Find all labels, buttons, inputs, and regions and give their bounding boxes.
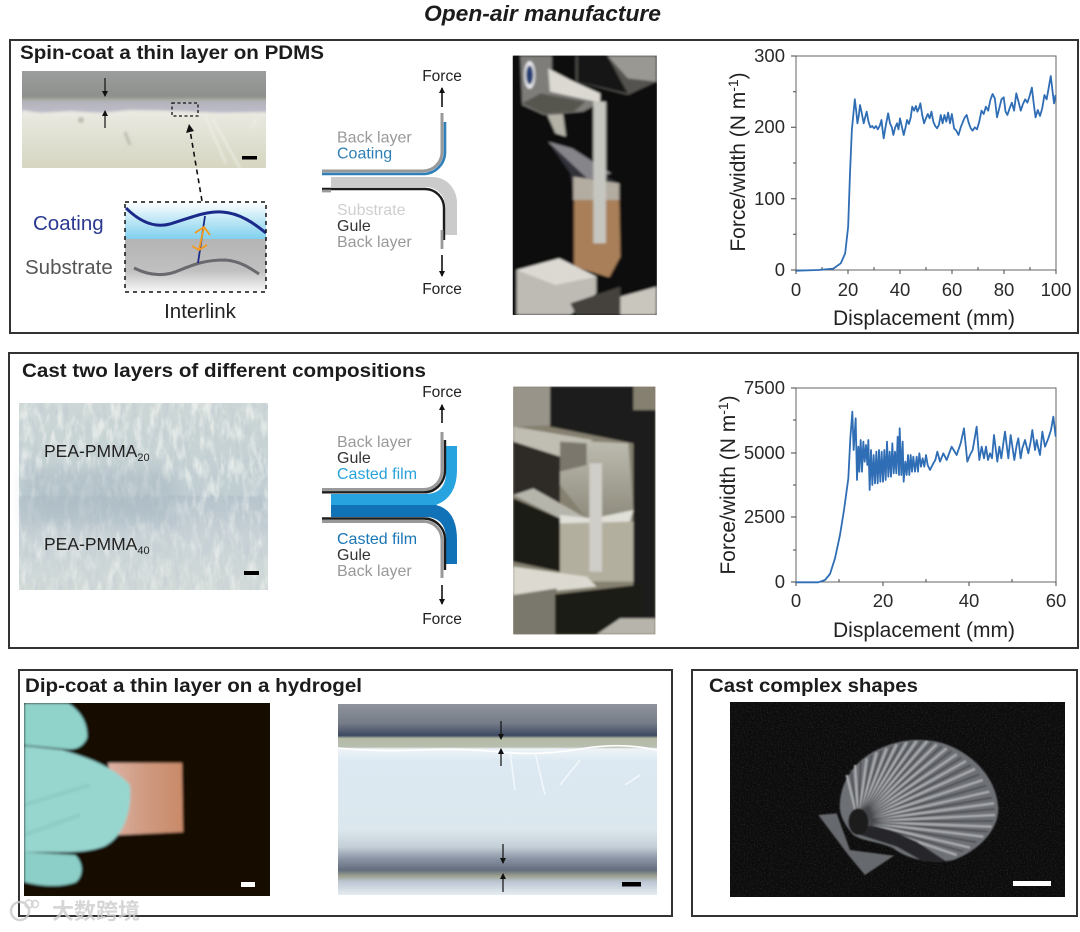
peel test diagram: casted films: Gule [337,547,371,564]
micrograph: PEA-PMMA layers [19,403,268,590]
force/width chart: casted films: 20 [873,590,893,611]
micrograph: PEA-PMMA layers: PEA-PMMA [44,534,137,554]
force/width chart: casted films: Displacement (mm) [833,619,1015,642]
micrograph: PEA-PMMA layers: 20 [137,452,150,464]
force/width chart: coating: 20 [838,279,858,300]
panel: spin-coat a thin layer on PDMS [10,40,1078,333]
peel test diagram: casted films: Casted film [337,466,417,483]
force/width chart: casted films: Force/width (N m [717,415,740,575]
peel test diagram: coating: Coating [337,146,392,162]
force/width chart: coating [725,45,1071,330]
data line [796,76,1056,271]
force/width chart: casted films: -1 [715,402,731,415]
dashed zoom arrow [186,124,202,201]
force/width chart: coating: 80 [994,279,1014,300]
force/width chart: casted films: ) [717,395,740,402]
force/width chart: casted films: 5000 [744,442,785,463]
force/width chart: casted films: 60 [1046,590,1066,611]
heading: Cast complex shapes [709,675,918,697]
force/width chart: coating: 200 [754,116,785,137]
peel test diagram: coating: Back layer [337,130,412,146]
force/width chart: casted films: 40 [959,590,979,611]
force/width chart: coating: 300 [754,45,785,66]
interlink schematic [125,202,266,292]
micrograph: PEA-PMMA layers: PEA-PMMA [44,441,137,461]
heading: Dip-coat a thin layer on a hydrogel [25,675,362,697]
peel test diagram: casted films: Force [422,611,462,628]
panel: dip-coat a thin layer on a hydrogel [19,670,672,916]
label: substrate: Substrate [25,256,113,279]
force/width chart: coating: 0 [791,279,801,300]
force/width chart: coating: Force/width (N m [727,92,750,252]
photo: gloved hand holding coated hydrogel [24,703,270,896]
force/width chart: casted films: 7500 [744,377,785,398]
watermark [11,899,140,924]
peel test diagram: casted films: Back layer [337,434,412,451]
peel test diagram: casted films: Back layer [337,563,412,580]
force/width chart: coating: 60 [942,279,962,300]
title: Open-air manufacture [424,1,661,26]
micrograph: hydrogel cross-section [338,704,657,895]
peel test diagram: casted films: Gule [337,450,371,467]
force/width chart: casted films [715,377,1066,642]
photo: cast scallop shell [730,702,1065,897]
force/width chart: coating: Displacement (mm) [833,307,1015,330]
peel test diagram: coating: Back layer [337,234,412,251]
peel test diagram: casted films: Casted film [337,531,417,548]
panel: cast complex shapes [692,670,1077,916]
micrograph: PDMS cross-section [22,71,266,168]
heading: Cast two layers of different compositions [22,360,426,382]
peel test diagram: coating: Force [422,281,462,298]
force/width chart: coating: 100 [754,188,785,209]
heading: Spin-coat a thin layer on PDMS [20,42,324,64]
label: interlink: Interlink [164,300,237,323]
peel test diagram: coating [322,68,462,298]
data line [796,412,1056,582]
micrograph: PEA-PMMA layers: 40 [137,545,150,557]
force/width chart: casted films: 0 [791,590,801,611]
peel test diagram: coating: Substrate [337,202,406,219]
force/width chart: coating: ) [727,72,750,79]
panel: cast two layers of different compositions [9,353,1078,648]
peel test diagram: casted films: Force [422,384,462,401]
force/width chart: coating: 40 [890,279,910,300]
photo: peel test of coating [513,56,657,315]
force/width chart: coating: -1 [725,79,741,92]
peel test diagram: casted films [322,384,462,628]
peel test diagram: coating: Gule [337,218,371,235]
force/width chart: coating: 0 [775,259,785,280]
peel test diagram: coating: Force [422,68,462,85]
photo: peel test of casted films [513,387,655,634]
force/width chart: coating: 100 [1041,279,1071,300]
force/width chart: casted films: 0 [775,571,785,592]
force/width chart: casted films: 2500 [744,506,785,527]
label: coating: Coating [33,212,104,235]
watermark: 大数跨境 [52,899,140,924]
